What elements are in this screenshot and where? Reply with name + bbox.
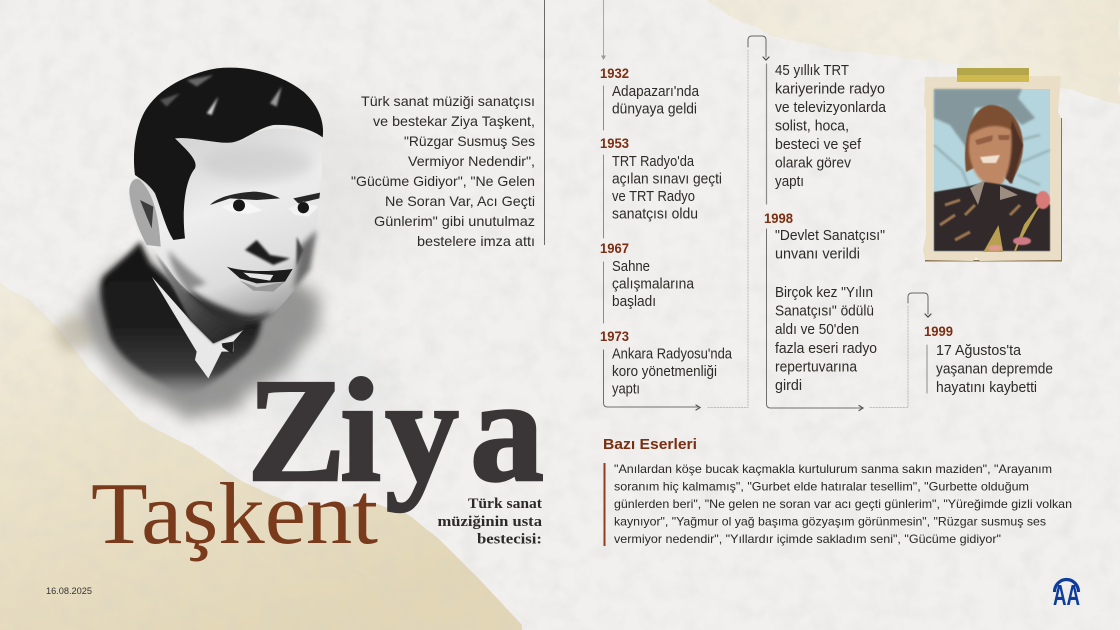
timeline item: 1967: çalışmalarına <box>612 276 695 292</box>
timeline item: 1953: 1953 <box>600 135 629 151</box>
card frame <box>923 76 1061 261</box>
timeline item: 1953 <box>600 135 722 222</box>
hair <box>965 105 1023 184</box>
timeline item: 1998 <box>764 210 885 394</box>
timeline item: TRT career <box>775 63 887 190</box>
timeline item: 1999: 17 Ağustos'ta <box>936 343 1022 359</box>
timeline item: TRT career: 45 yıllık TRT <box>775 63 849 79</box>
timeline item: 1953: sanatçısı oldu <box>612 206 698 222</box>
forehead shade <box>200 145 313 182</box>
timeline item: 1973: 1973 <box>600 328 629 344</box>
timeline item: 1998: 1998 <box>764 210 793 226</box>
works text block: kaynıyor", "Yağmur ol yağ başıma gözyaşım görünmesin", "Rüzgar susmuş ses <box>614 514 1046 528</box>
timeline item: 1998: "Devlet Sanatçısı" <box>775 228 885 244</box>
timeline item: 1973: Ankara Radyosu'nda <box>612 346 733 362</box>
shirt <box>934 182 1050 251</box>
works text block: soranım hiç kalmamış", "Gurbet elde hatıralar tesellim", "Gurbette olduğum <box>614 480 1029 494</box>
timeline item: TRT career: kariyerinde radyo <box>775 82 885 98</box>
timeline item: 1967: başladı <box>612 294 656 310</box>
beige stain <box>55 315 92 352</box>
timeline item: 1967: 1967 <box>600 240 629 256</box>
timeline item: 1932: Adapazarı'nda <box>612 84 700 100</box>
works text block: vermiyor nedendir", "Yıllardır içimde sakladım seni", "Gücüme gidiyor" <box>614 532 1001 546</box>
nose shadow <box>245 237 303 267</box>
timeline item: 1998: aldı ve 50'den <box>775 322 859 338</box>
timeline item: 1953: açılan sınavı geçti <box>612 172 722 188</box>
card shadow <box>925 118 1062 262</box>
jaw and cheek shadows <box>168 230 317 325</box>
intro text block: Türk sanat müziği sanatçısı <box>361 93 535 109</box>
intro text block: Ne Soran Var, Acı Geçti <box>385 193 535 209</box>
shirt collar and bow tie <box>152 277 243 378</box>
timeline item: 1999: 1999 <box>924 323 953 339</box>
intro text block: Günlerim" gibi unutulmaz <box>374 213 535 229</box>
intro text block: "Gücüme Gidiyor", "Ne Gelen <box>351 173 535 189</box>
face <box>129 128 322 321</box>
timeline item: 1932 <box>600 65 700 118</box>
timeline item: 1953: TRT Radyo'da <box>612 154 695 170</box>
timeline item: 1967 <box>600 240 695 310</box>
timeline connector lines and arrows <box>601 0 931 410</box>
face <box>969 126 1012 186</box>
timeline item: 1973 <box>600 328 733 398</box>
title: Ziya: Ziya <box>247 349 544 513</box>
timeline item: 1998: fazla eseri radyo <box>775 341 877 357</box>
intro divider line <box>544 0 546 245</box>
eyebrows <box>210 192 320 205</box>
timeline item: 1973: koro yönetmenliği <box>612 364 717 380</box>
timeline item: 1999 <box>924 323 1053 396</box>
works text block: "Anılardan köşe bucak kaçmakla kurtulurum sanma sakın maziden", "Arayanım <box>614 462 1052 476</box>
timeline item: 1998: repertuvarına <box>775 360 858 376</box>
intro text block: bestelere imza attı <box>417 233 535 249</box>
intro text block: Vermiyor Nedendir", <box>408 153 535 169</box>
intro text block <box>351 93 535 249</box>
timeline item: 1973: yaptı <box>612 382 640 398</box>
timeline item: 1998: unvanı verildi <box>775 246 860 262</box>
icon: AA logo: AA <box>1053 580 1080 612</box>
subtitle: Türk sanat <box>468 496 542 512</box>
hair <box>134 68 323 240</box>
neck <box>155 253 248 343</box>
icon: AA logo <box>1053 580 1080 612</box>
title: Taşkent: Taşkent <box>91 466 378 563</box>
timeline item: 1999: hayatını kaybetti <box>936 380 1037 396</box>
timeline item: TRT career: besteci ve şef <box>775 137 862 153</box>
suit <box>101 242 262 395</box>
mouth and teeth <box>227 267 293 292</box>
intro text block: "Rüzgar Susmuş Ses <box>404 133 535 149</box>
timeline item: TRT career: yaptı <box>775 174 804 190</box>
tape <box>957 68 1029 82</box>
timeline item: 1999: yaşanan depremde <box>936 362 1053 378</box>
timeline item: TRT career: olarak görev <box>775 156 852 172</box>
subtitle: bestecisi: <box>477 532 542 548</box>
timeline item: 1998: Sanatçısı" ödülü <box>775 304 874 320</box>
timeline item: TRT career: ve televizyonlarda <box>775 100 887 116</box>
timeline item: 1998: girdi <box>775 378 802 394</box>
subtitle: müziğinin usta <box>438 514 543 530</box>
eyes <box>222 199 318 217</box>
works text block <box>614 462 1072 546</box>
timeline item: 1998: Birçok kez "Yılın <box>775 285 873 301</box>
date: 16.08.2025 <box>46 586 92 596</box>
works accent bar <box>604 463 606 546</box>
portrait: black and white photo of Ziya Taşkent <box>55 68 324 416</box>
flowers <box>985 205 1040 251</box>
timeline item: 1953: ve TRT Radyo <box>612 189 695 205</box>
intro text block: ve bestekar Ziya Taşkent, <box>373 113 535 129</box>
ear <box>129 179 161 247</box>
timeline item: TRT career: solist, hoca, <box>775 118 849 134</box>
timeline item: 1932: 1932 <box>600 65 629 81</box>
photo <box>934 89 1050 251</box>
timeline item: 1967: Sahne <box>612 259 650 275</box>
works text block: günlerden beri", "Ne gelen ne soran var acı geçti günlerim", "Yüreğimde gizli volkan <box>614 497 1072 511</box>
subtitle <box>438 496 543 548</box>
heading: Bazı Eserleri: Bazı Eserleri <box>603 436 697 453</box>
timeline item: 1932: dünyaya geldi <box>612 102 697 118</box>
hair highlights <box>160 75 282 115</box>
ink wash behind suit <box>80 253 324 416</box>
photo card: colour photo with taped frame <box>923 68 1062 262</box>
